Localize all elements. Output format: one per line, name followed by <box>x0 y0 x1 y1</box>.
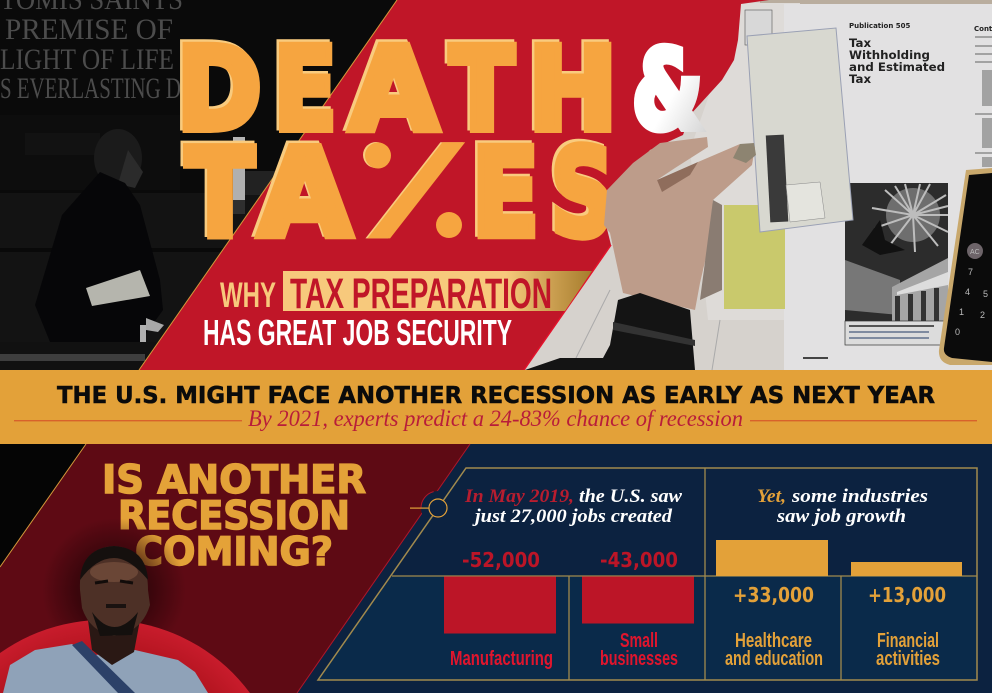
head <box>80 546 150 636</box>
left column heading: just 27,000 jobs created <box>472 506 673 527</box>
title line one: E <box>274 23 337 156</box>
title highlight layer: A <box>256 120 349 261</box>
phone: 1 <box>959 307 964 317</box>
phone: 5 <box>983 289 988 299</box>
form heading: Withholding <box>849 48 930 62</box>
panel: red diagonal band <box>139 0 769 370</box>
heading: is another recession coming <box>102 458 366 575</box>
heading: is another recession coming: IS ANOTHER <box>102 458 366 503</box>
stylised X as a percent sign: / <box>364 119 471 256</box>
bar: small businesses: Small <box>620 630 658 652</box>
inscription carved in wall: PREMISE OF <box>5 13 173 46</box>
bar: manufacturing <box>444 548 556 670</box>
connector circle <box>410 499 447 517</box>
right column heading: Yet, <box>757 486 786 507</box>
panel: lower background <box>0 444 992 693</box>
envelope <box>747 28 853 232</box>
subtitle: HAS GREAT JOB SECURITY <box>203 312 512 353</box>
bench <box>0 342 160 370</box>
contents column <box>975 36 992 167</box>
phone: 0 <box>955 327 960 337</box>
title line two: A <box>259 123 351 264</box>
title line two: S <box>551 123 614 264</box>
title line one: T <box>450 23 514 156</box>
phone: 4 <box>965 287 970 297</box>
title highlight layer: E <box>271 20 334 154</box>
chart panel <box>318 468 977 680</box>
bar: healthcare and education: +33,000 <box>733 583 814 607</box>
bar: healthcare and education <box>716 540 828 670</box>
title line one: D <box>177 23 262 156</box>
bar: healthcare and education: Healthcare <box>735 630 812 652</box>
bracelets <box>525 293 695 370</box>
bar: healthcare and education: and education <box>725 648 823 670</box>
bar: financial activities: Financial <box>877 630 939 652</box>
title highlight layer: T <box>184 120 252 261</box>
inscription carved in wall: LIGHT OF LIFE <box>0 43 174 76</box>
inscription carved in wall <box>0 0 183 105</box>
title highlight layer: S <box>548 120 611 261</box>
heading: is another recession coming: RECESSION <box>118 494 350 539</box>
banner <box>0 370 992 444</box>
title line two <box>186 123 614 264</box>
phone: 2 <box>980 310 985 320</box>
left column heading: In May 2019, <box>464 486 574 507</box>
bar: small businesses <box>582 548 694 670</box>
tax form sheet <box>784 4 992 370</box>
neck <box>88 620 140 665</box>
man with red circle <box>0 518 250 693</box>
left column heading <box>464 486 682 527</box>
bar: financial activities: +13,000 <box>868 583 946 607</box>
title line two: E <box>472 123 539 264</box>
heading: is another recession coming: COMING? <box>135 530 333 575</box>
subtitle: TAX PREPARATION <box>290 270 552 318</box>
title highlight layer: H <box>526 20 615 154</box>
form heading: Tax <box>849 72 871 86</box>
right column heading <box>757 486 928 527</box>
banner heading: THE U.S. MIGHT FACE ANOTHER RECESSION AS EARLY AS NEXT YEAR <box>57 383 935 409</box>
title line one <box>177 23 617 156</box>
highlight box <box>283 271 592 311</box>
title: DEATH & TAXES <box>174 20 703 264</box>
title highlight layer: A <box>348 20 436 154</box>
bag strap <box>72 641 135 693</box>
phone <box>939 168 992 365</box>
subtitle: WHY <box>220 276 276 315</box>
hand <box>604 137 756 310</box>
sticky note <box>724 205 785 309</box>
inscription carved in wall: S EVERLASTING D <box>0 72 181 105</box>
bar: manufacturing: Manufacturing <box>450 648 553 670</box>
banner subheading: By 2021, experts predict a 24-83% chance of recession <box>248 406 743 431</box>
title line one: A <box>350 23 438 156</box>
title line one: H <box>528 23 617 156</box>
bar: manufacturing: -52,000 <box>462 548 540 572</box>
panel: left church photo <box>0 0 420 370</box>
ampersand: & <box>632 28 702 154</box>
right column heading: saw job growth <box>776 506 906 527</box>
bar: financial activities <box>851 562 962 670</box>
connector node <box>421 491 455 525</box>
form illustration <box>845 183 948 321</box>
candle <box>233 137 280 214</box>
bar: financial activities: activities <box>876 648 940 670</box>
title line two: T <box>186 123 254 264</box>
form heading: and Estimated <box>849 60 945 74</box>
phone: AC <box>970 249 980 256</box>
form heading: Tax <box>849 36 871 50</box>
right column heading: some industries <box>791 486 928 507</box>
subtitle <box>203 270 592 353</box>
title highlight layer: T <box>448 20 512 154</box>
shirt <box>3 644 208 693</box>
form heading: Publication 505 <box>849 22 911 30</box>
title highlight layer: D <box>174 20 259 154</box>
form heading <box>849 22 992 86</box>
panel: right desk photo <box>520 0 992 370</box>
bar: small businesses: -43,000 <box>600 548 678 572</box>
man in robe <box>35 129 164 343</box>
bar: small businesses: businesses <box>600 648 678 670</box>
stylised X as a percent sign: / <box>362 119 469 256</box>
title highlight layer: E <box>470 120 536 261</box>
left column heading: the U.S. saw <box>579 486 682 507</box>
title highlight layer <box>174 20 615 261</box>
corner slip <box>745 10 772 45</box>
phone: 7 <box>968 267 973 277</box>
